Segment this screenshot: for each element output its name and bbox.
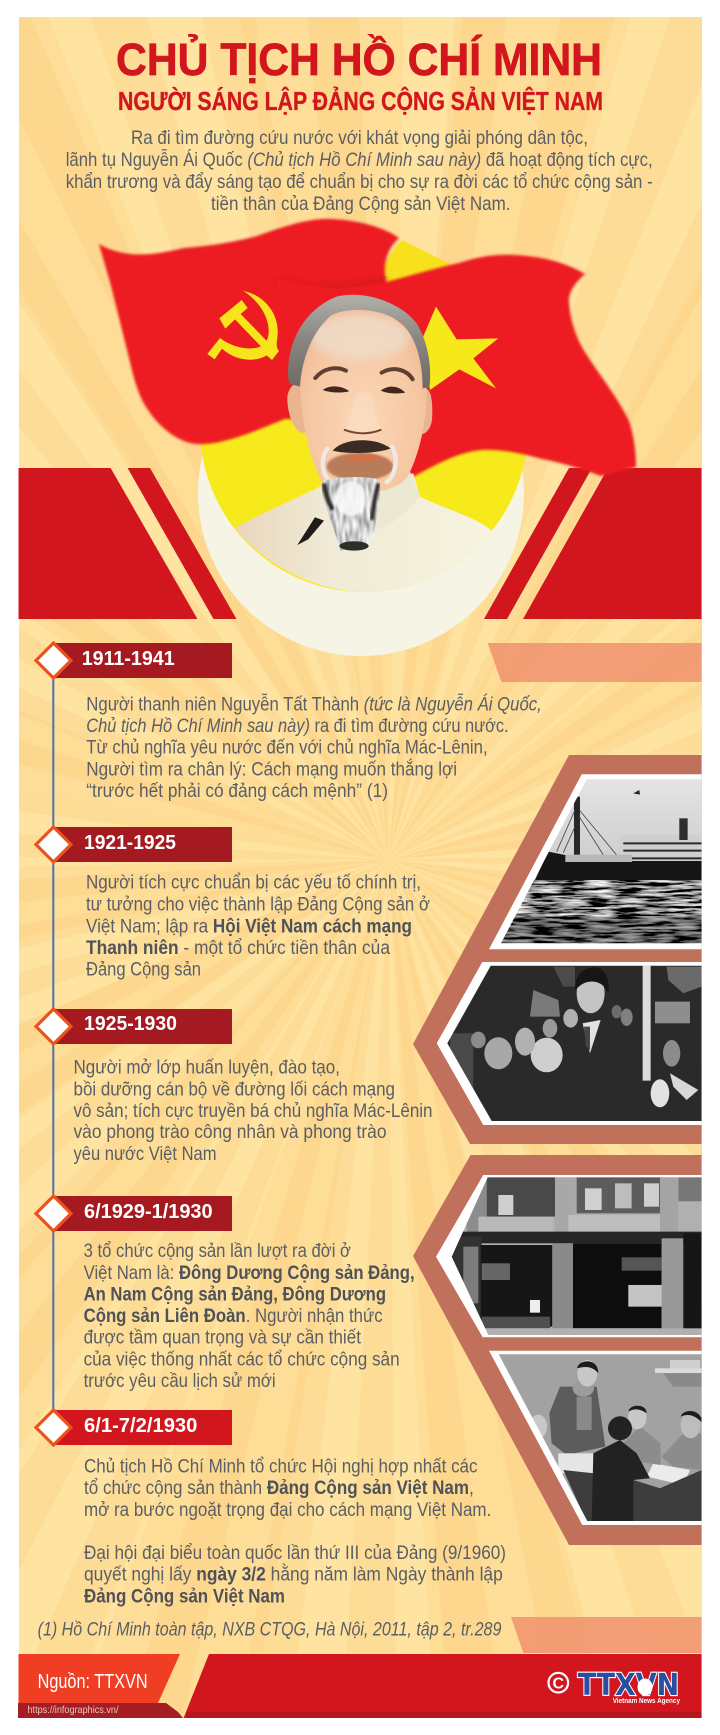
body text: Người thanh niên Nguyễn Tất Thành (tức là Nguyễn Ái Quốc,: [86, 693, 542, 715]
collar shadow: [297, 517, 324, 545]
body text: của việc thống nhất các tổ chức cộng sản: [84, 1350, 400, 1371]
body text: Thanh niên - một tổ chức tiền thân của: [86, 938, 390, 959]
year label: 1925-1930: [84, 1013, 177, 1035]
timeline line: [52, 660, 54, 1430]
photo 3: building: [436, 1175, 703, 1337]
portrait of President Ho Chi Minh: [235, 295, 495, 592]
year header 1921-1925: [55, 827, 232, 862]
building image: [450, 1177, 703, 1337]
body text: Đảng Cộng sản Việt Nam: [84, 1586, 285, 1607]
nose shadow: [345, 430, 381, 433]
white frame: [489, 1351, 702, 1525]
painting image: [497, 1353, 703, 1523]
logo: TTXVN wordmark: TTXVN: [578, 1668, 679, 1703]
body text: yêu nước Việt Nam: [74, 1144, 216, 1165]
brown hexagon frames behind photos: [413, 755, 702, 1545]
body text: [84, 1241, 415, 1392]
nose shade: [347, 393, 380, 435]
flags and portrait: [99, 219, 636, 592]
body text: vô sản; tích cực truyền bá chủ nghĩa Mác-Lênin: [74, 1101, 432, 1122]
year header 6/1929-1/1930: [55, 1196, 232, 1231]
body text: [84, 1456, 506, 1607]
logo: copyright mark: C: [553, 1676, 565, 1692]
timeline item 3: [36, 1009, 432, 1165]
lower face shade: [327, 453, 393, 481]
year label: 1921-1925: [84, 832, 176, 854]
moustache: [333, 440, 391, 453]
body text: [74, 1058, 432, 1165]
year label: 6/1-7/2/1930: [84, 1415, 197, 1437]
shirt: [235, 473, 495, 592]
body text: Từ chủ nghĩa yêu nước đến với chủ nghĩa Mác-Lênin,: [86, 738, 488, 759]
photo 2: young Nguyen Ai Quoc at congress: [437, 962, 703, 1125]
white frame: [437, 962, 702, 1125]
diamond marker: [36, 1196, 71, 1231]
eyebrows: [315, 368, 413, 379]
left party flag: [99, 219, 400, 444]
year header 1911-1941: [55, 643, 232, 678]
salmon accent bar bottom: [511, 1617, 702, 1653]
ship image: [500, 778, 703, 945]
white frame: [489, 774, 702, 949]
beard dark flank left: [324, 483, 333, 510]
cream circle under portrait: [198, 330, 524, 656]
timeline item 4: [36, 1196, 415, 1392]
timeline item 5: [36, 1410, 506, 1607]
right national flag: [275, 255, 636, 477]
eyes: [323, 386, 405, 393]
photo 1: ship: [489, 774, 703, 949]
diamond marker: [36, 643, 71, 678]
body text: tư tưởng cho việc thành lập Đảng Cộng sản ở: [86, 895, 430, 916]
diamond marker: [36, 1009, 71, 1044]
body text: An Nam Cộng sản Đảng, Đông Dương: [84, 1284, 386, 1306]
beard dark flank right: [372, 483, 378, 520]
body text: Đảng Cộng sản: [86, 960, 201, 981]
diamond marker: [36, 827, 71, 862]
body text: Việt Nam; lập ra Hội Việt Nam cách mạng: [86, 916, 412, 938]
body text: vào phong trào công nhân và phong trào: [74, 1122, 386, 1143]
body text: bồi dưỡng cán bộ về đường lối cách mạng: [74, 1079, 395, 1100]
body text: Người tích cực chuẩn bị các yếu tố chính trị,: [86, 873, 421, 894]
body text: Người tìm ra chân lý: Cách mạng muốn thắng lợi: [86, 758, 457, 780]
beard white core: [335, 481, 366, 516]
star: [422, 307, 498, 390]
year label: 6/1929-1/1930: [84, 1201, 213, 1223]
body text: quyết nghị lấy ngày 3/2 hằng năm làm Ngày thành lập: [84, 1564, 503, 1586]
logo: copyright mark: [548, 1673, 568, 1692]
face: [300, 308, 427, 494]
footer: [18, 1654, 702, 1718]
diamond marker: [36, 1410, 71, 1445]
white frame: [436, 1175, 702, 1337]
footnote: (1) Hồ Chí Minh toàn tập, NXB CTQG, Hà Nội, 2011, tập 2, tr.289: [38, 1620, 502, 1641]
year header 1925-1930: [55, 1009, 232, 1044]
source text: Nguồn: TTXVN: [38, 1671, 148, 1693]
footer red bar: [184, 1654, 702, 1718]
forehead tone: [310, 313, 410, 360]
intro text: Ra đi tìm đường cứu nước với khát vọng giải phóng dân tộc,: [131, 127, 588, 149]
neck and collar: [375, 472, 420, 530]
url strip: [18, 1703, 183, 1718]
body text: Chủ tịch Hồ Chí Minh tổ chức Hội nghị hợp nhất các: [84, 1456, 478, 1477]
body text: Việt Nam là: Đông Dương Cộng sản Đảng,: [84, 1263, 415, 1284]
red ribbon bands behind portrait: [18, 468, 702, 619]
url text: https://infographics.vn/: [28, 1704, 119, 1716]
yellow disc behind flags: [200, 264, 528, 592]
intro text: lãnh tụ Nguyễn Ái Quốc (Chủ tịch Hồ Chí Minh sau này) đã hoạt động tích cực,: [66, 148, 653, 171]
intro text: tiền thân của Đảng Cộng sản Việt Nam.: [211, 193, 510, 215]
body text: trước yêu cầu lịch sử mới: [84, 1371, 276, 1392]
body text: “trước hết phải có đảng cách mệnh” (1): [86, 781, 388, 802]
congress image: [443, 963, 703, 1123]
source panel: [18, 1654, 180, 1703]
yellow flag piece between flags: [386, 240, 452, 284]
body text: mở ra bước ngoặt trọng đại cho cách mạng Việt Nam.: [84, 1500, 491, 1521]
logo: hand mark: [638, 1678, 652, 1696]
intro text: [66, 127, 653, 215]
body text: [86, 693, 542, 802]
body text: tổ chức cộng sản thành Đảng Cộng sản Việt Nam,: [84, 1478, 474, 1499]
beard tip: [339, 541, 369, 551]
title: CHỦ TỊCH HỒ CHÍ MINH: [116, 34, 602, 85]
photo 4: founding conference painting: [489, 1351, 703, 1525]
body text: Cộng sản Liên Đoàn. Người nhận thức: [84, 1306, 383, 1327]
body text: 3 tổ chức cộng sản lần lượt ra đời ở: [84, 1241, 351, 1262]
white side whiskers: [323, 447, 396, 482]
timeline item 1: [36, 643, 542, 802]
year header 6/1-7/2/1930: [55, 1410, 232, 1445]
logo: tagline: Vietnam News Agency: [613, 1696, 681, 1705]
body text: Chủ tịch Hồ Chí Minh sau này) ra đi tìm đường cứu nước.: [86, 716, 509, 737]
salmon accent bar top: [488, 643, 702, 682]
lips: [346, 454, 381, 462]
body text: Đại hội đại biểu toàn quốc lần thứ III của Đảng (9/1960): [84, 1543, 506, 1564]
subtitle: NGƯỜI SÁNG LẬP ĐẢNG CỘNG SẢN VIỆT NAM: [118, 86, 603, 116]
year label: 1911-1941: [82, 648, 175, 670]
ears: [287, 383, 432, 434]
body text: [86, 873, 430, 981]
body text: Người mở lớp huấn luyện, đào tạo,: [74, 1058, 340, 1079]
hair: [288, 295, 430, 388]
body text: được tầm quan trọng và sự cần thiết: [84, 1328, 362, 1349]
flag seam shadow: [276, 278, 386, 287]
hammer and sickle: [207, 291, 279, 360]
beard: [321, 477, 380, 551]
timeline item 2: [36, 827, 430, 981]
